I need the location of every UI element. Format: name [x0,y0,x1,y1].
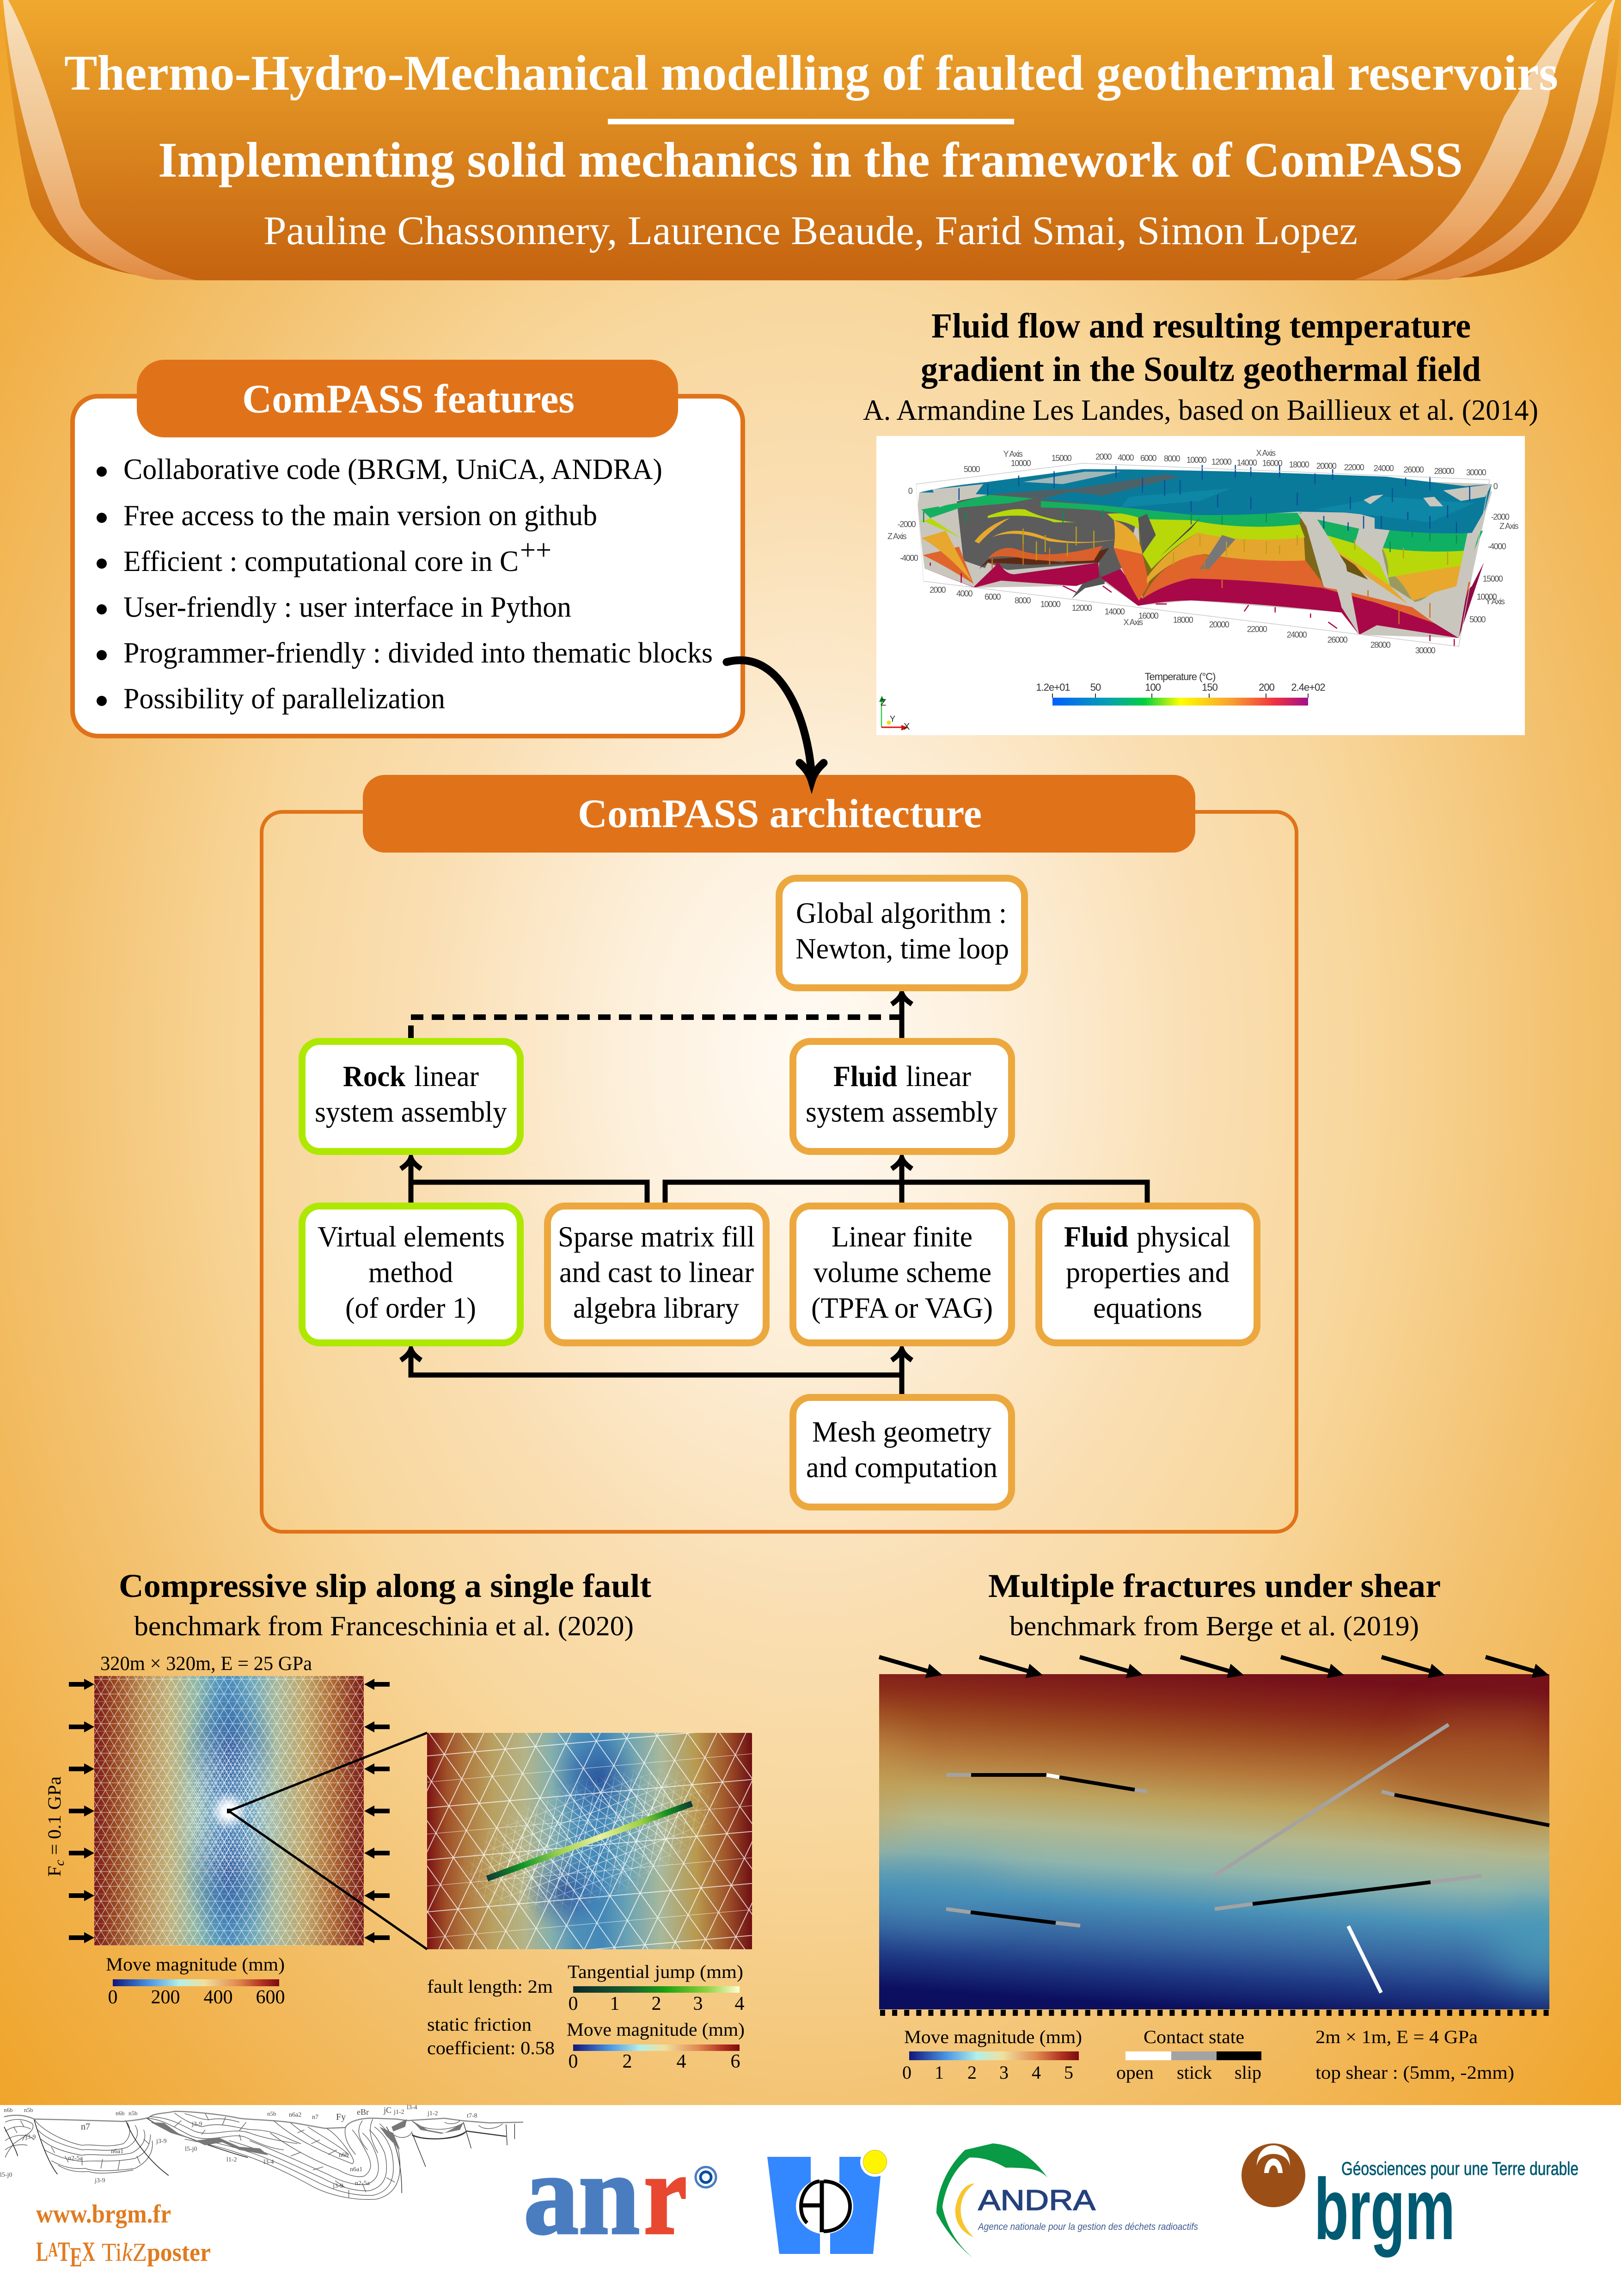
title: Thermo-Hydro-Mechanical modelling of faulted geothermal reservoirs [64,46,1558,101]
legend: contact state: Contact state [1144,2026,1244,2047]
box: linear finite volume scheme: (TPFA or VAG) [811,1291,993,1324]
temperature colour bar: 100 [1145,681,1161,693]
legend: tangential jump: Tangential jump (mm) [568,1961,743,1982]
heading: compressive slip [119,1567,651,1641]
mesh: zoom on fault [427,1732,752,1949]
shear parameters: top shear : (5mm, -2mm) [1315,2062,1514,2083]
sketch labels: j3-9 [94,2177,105,2184]
axis labels: 18000 [1289,460,1309,469]
box: mesh geometry: Mesh geometry [812,1415,991,1448]
features heading [137,360,678,437]
axis labels: 5000 [1469,615,1486,624]
subtitle: Implementing solid mechanics in the framework of ComPASS [158,133,1463,188]
box: fluid linear system assembly: linear [906,1060,971,1093]
legend: move magnitude zoom: 6 [730,2051,740,2072]
heading: compressive slip: Compressive slip along a single fault [119,1567,651,1604]
sketch labels: l3-4 [263,2159,274,2166]
sketch labels: j1-2 [393,2109,404,2116]
axis labels: 30000 [1415,646,1436,655]
axis labels: 30000 [1466,468,1486,477]
arrow: mesh to virtual elements and finite volume [401,1349,912,1394]
axis labels: 10000 [1040,600,1061,609]
legend: contact state [1116,2026,1261,2083]
axis labels: Y Axis [1486,597,1505,606]
axis labels: 14000 [1237,458,1257,467]
logo: ANDRA: ANDRA [978,2185,1096,2216]
axis labels: 2000 [930,585,946,595]
feature list: Efficient : computational core in C [123,545,519,577]
heading: multiple fractures: benchmark from Berge et al. (2019) [1009,1611,1419,1641]
arrow: sparse, finite volume and fluid properties to fluid assembly [665,1158,1147,1203]
legend: move magnitude full domain: 600 [256,1987,285,2008]
box: global algorithm [779,878,1024,988]
temperature colour bar: 50 [1090,681,1101,693]
heading: multiple fractures [988,1567,1441,1641]
axis labels: 4000 [1118,453,1134,462]
axis labels: 15000 [1052,454,1072,463]
mesh: full domain [94,1674,364,1949]
axis labels: 10000 [1477,592,1497,602]
axis labels: -4000 [1488,542,1506,551]
legend: tangential jump: 0 [569,1993,578,2014]
box: fluid linear system assembly: Fluid [833,1060,897,1093]
axis labels: 24000 [1374,464,1394,473]
orientation axes: Z [881,698,886,708]
sketch labels: n5b [24,2106,33,2113]
axis labels: X Axis [1123,618,1143,627]
sketch labels: n5b [267,2110,276,2117]
heading: compressive slip: benchmark from Franceschinia et al. (2020) [134,1611,634,1641]
heading: multiple fractures: Multiple fractures under shear [988,1567,1441,1604]
axis labels: 28000 [1434,467,1455,476]
sketch labels: n2-5a [68,2155,83,2162]
footer band [0,2104,1621,2296]
axis labels: 8000 [1164,454,1181,463]
feature list: Collaborative code (BRGM, UniCA, ANDRA) [123,453,662,485]
shear arrows [879,1657,1549,1678]
LaTeX TikZposter credit [36,2236,211,2272]
heading: Soultz figure: A. Armandine Les Landes, based on Baillieux et al. (2014) [863,394,1538,426]
header banner [0,0,1621,280]
logo: ADI [767,2147,890,2254]
axis labels: -2000 [898,520,916,529]
arrow: fluid assembly to global algorithm [892,993,912,1038]
LaTeX TikZposter credit: T [58,2236,70,2267]
load arrows right [364,1679,390,1943]
LaTeX TikZposter credit: A [48,2238,58,2261]
temperature colour bar: 150 [1202,681,1218,693]
orientation axes [879,696,910,732]
legend: move magnitude zoom: 4 [677,2051,686,2072]
arrow: features to architecture [727,660,824,780]
panel: multiple fractures figure [878,1655,1550,2083]
logo: anr: r [644,2130,687,2259]
legend: move magnitude full domain: 400 [203,1987,233,2008]
box: sparse matrix: Sparse matrix fill [558,1220,755,1253]
sketch labels: j3-9 [332,2183,343,2190]
box: fluid physical properties: equations [1093,1291,1202,1324]
orientation axes: Y [890,714,895,724]
displacement field [841,1674,1595,2009]
load label: F [44,1866,65,1877]
legend: contact state: stick [1177,2062,1212,2083]
sketch labels: eBr [357,2107,369,2117]
axis labels: 28000 [1370,640,1391,650]
temperature colour bar: 1.2e+01 [1036,681,1070,693]
temperature colour bar: 200 [1259,681,1275,693]
axis labels: 18000 [1173,615,1193,625]
sketch labels: j1-2 [427,2110,438,2117]
sketch labels: j3-9 [191,2121,202,2128]
box: virtual elements method: method [368,1256,453,1289]
feature list: User-friendly : user interface in Python [123,590,571,623]
website: www.brgm.fr [36,2200,171,2228]
legend: contact state: slip [1235,2062,1261,2083]
sketch labels: n6a1 [111,2148,123,2155]
heading: Soultz figure: gradient in the Soultz geothermal field [921,350,1481,389]
sketch labels: n2-5a [355,2180,370,2187]
legend: tangential jump [568,1961,744,2014]
axis labels: -2000 [1491,512,1510,522]
sketch labels: n6a2 [289,2112,301,2118]
logo: ANDRA [936,2143,1198,2258]
box: virtual elements method: (of order 1) [345,1291,476,1324]
box: fluid linear system assembly [793,1041,1011,1151]
sketch labels: l5-j0 [185,2146,197,2153]
logo: anr: an [524,2130,640,2259]
box: rock linear system assembly: Rock [343,1060,405,1093]
load label: c [53,1860,67,1866]
legend: move magnitude full domain: 200 [151,1987,180,2008]
legend: move magnitude zoom: 2 [622,2051,632,2072]
geological cross-section sketch [0,2104,523,2199]
connector: dashed rock to global [411,1017,902,1038]
LaTeX TikZposter credit: L [36,2236,55,2267]
axis labels: 0 [1493,482,1498,491]
LaTeX TikZposter credit: TikZ [102,2238,147,2267]
legend: move magnitude full domain [106,1954,285,2008]
box: rock linear system assembly: system assembly [315,1095,507,1128]
box: sparse matrix: and cast to linear [559,1256,754,1289]
box: mesh geometry: and computation [806,1451,997,1484]
legend: move magnitude zoom [567,2019,745,2072]
axis labels: 8000 [1015,596,1031,605]
LaTeX TikZposter credit: E [70,2242,82,2272]
axis labels: 20000 [1316,461,1337,471]
fractures [946,1725,1549,1993]
legend: move magnitude: 5 [1064,2062,1073,2083]
axis labels: 24000 [1287,630,1307,639]
features heading: ComPASS features [242,377,575,422]
sketch labels: l5-j0 [0,2172,12,2179]
axis labels: 2000 [1095,452,1112,461]
legend: move magnitude full domain: 0 [108,1987,117,2008]
flow vectors [924,465,1470,646]
sketch labels: l1-2 [226,2156,237,2163]
panel: ComPASS features [73,360,743,736]
box: rock linear system assembly [302,1041,520,1151]
axis labels: 20000 [1209,620,1230,629]
sketch labels: t7-8 [467,2112,477,2119]
axis labels: X Axis [1256,448,1276,458]
box: fluid physical properties: Fluid [1064,1220,1128,1253]
sketch labels: Fy [336,2112,346,2122]
fault parameters: coefficient: 0.58 [427,2038,555,2058]
panel: ComPASS architecture [262,775,1297,1532]
temperature colour bar: Temperature (°C) [1145,671,1215,682]
legend: move magnitude zoom: 0 [569,2051,578,2072]
axis labels: 16000 [1138,611,1159,620]
legend: move magnitude: Move magnitude (mm) [904,2026,1082,2047]
legend: move magnitude: 1 [935,2062,944,2083]
axis labels: 10000 [1187,455,1207,465]
load label: = 0.1 GPa [44,1776,65,1860]
axis labels: -4000 [900,553,918,563]
domain size label: 320m × 320m, E = 25 GPa [100,1653,312,1675]
fault parameters: static friction [427,2014,532,2035]
box: mesh geometry [793,1397,1011,1507]
axis labels: 10000 [1011,459,1031,468]
sketch labels: n5b [128,2110,138,2117]
axis labels: 22000 [1344,463,1364,472]
temperature colour bar [1036,671,1325,706]
box: virtual elements method: Virtual elements [318,1220,505,1253]
box: fluid linear system assembly: system assembly [806,1095,998,1128]
box: global algorithm: Newton, time loop [795,932,1009,965]
box: global algorithm: Global algorithm : [796,896,1007,929]
axis labels: 4000 [956,589,973,598]
feature list: ++ [520,534,551,566]
box: sparse matrix [547,1206,766,1343]
legend: tangential jump: 4 [735,1993,744,2014]
temperature colour bar: 2.4e+02 [1291,681,1325,693]
axis labels: 6000 [985,592,1001,602]
feature list: Programmer-friendly : divided into thematic blocks [123,636,713,669]
sketch labels: jC [383,2106,391,2115]
architecture heading [363,775,1195,853]
legend: move magnitude full domain: Move magnitude (mm) [106,1954,285,1975]
axis labels: Z Axis [1499,522,1519,531]
axis labels: 22000 [1247,625,1267,634]
sketch labels: j3-9 [156,2138,167,2145]
box: linear finite volume scheme: Linear finite [832,1220,973,1253]
feature list: Free access to the main version on github [123,499,597,532]
legend: move magnitude: 0 [902,2062,911,2083]
legend: move magnitude: 4 [1032,2062,1041,2083]
axis labels: 6000 [1140,454,1157,463]
legend: tangential jump: 3 [693,1993,703,2014]
zoom connector lines [229,1733,427,1949]
box: sparse matrix: algebra library [573,1291,739,1324]
feature list: Possibility of parallelization [123,682,445,715]
box: fluid physical properties: physical [1137,1220,1230,1253]
logo: BRGM: brgm [1314,2161,1455,2258]
heading: Soultz figure [863,307,1538,426]
fault [487,1804,692,1879]
architecture heading: ComPASS architecture [578,792,982,836]
LaTeX TikZposter credit: X [82,2236,95,2267]
axis labels: 15000 [1483,574,1503,583]
authors: Pauline Chassonnery, Laurence Beaude, Farid Smai, Simon Lopez [263,209,1358,253]
chart: Soultz 3D temperature model [876,436,1525,735]
legend: tangential jump: 2 [652,1993,661,2014]
box: fluid physical properties [1039,1206,1257,1343]
sketch labels: n6b [339,2152,349,2159]
logo: ANDRA: Agence nationale pour la gestion des déchets radioactifs [977,2222,1198,2232]
fixed boundary [880,2010,1549,2016]
arrow: virtual elements and sparse matrix to rock assembly [401,1158,647,1203]
heading: Soultz figure: Fluid flow and resulting temperature [931,307,1471,345]
LaTeX TikZposter credit: poster [147,2238,211,2267]
axis labels: 14000 [1105,607,1125,616]
axis labels: 26000 [1327,635,1348,645]
load arrows left [69,1679,94,1943]
panel: compressive slip figures [44,1653,752,2072]
axis labels: 12000 [1072,603,1092,613]
title rule [608,119,1014,124]
3D geological layers [916,463,1492,646]
legend: contact state: open [1116,2062,1154,2083]
sketch labels: l3-4 [407,2104,417,2111]
legend: move magnitude: 3 [999,2062,1009,2083]
sketch labels: n7 [312,2114,318,2121]
box: linear finite volume scheme [793,1206,1011,1343]
axis labels: 0 [908,486,913,496]
sketch labels: j3-9 [25,2134,36,2141]
sketch labels: n6a1 [350,2166,362,2173]
legend: move magnitude zoom: Move magnitude (mm) [567,2019,745,2040]
orientation axes: X [904,722,910,732]
sketch labels: n6b [116,2110,125,2117]
feature list [97,453,713,715]
shear parameters [1315,2026,1514,2083]
axis labels: 16000 [1262,459,1283,468]
box: linear finite volume scheme: volume scheme [814,1256,991,1289]
fault parameters: fault length: 2m [427,1976,553,1997]
legend: move magnitude [902,2026,1082,2083]
logo: BRGM [1242,2143,1578,2258]
axis labels: Y Axis [1003,449,1023,459]
box: rock linear system assembly: linear [414,1060,479,1093]
fault parameters [427,1976,555,2058]
box: fluid physical properties: properties and [1066,1256,1230,1289]
legend: move magnitude: 2 [967,2062,977,2083]
legend: tangential jump: 1 [610,1993,619,2014]
axis labels: 26000 [1404,465,1424,474]
axis labels: 12000 [1211,457,1232,467]
sketch labels: n6b [4,2106,13,2113]
box: virtual elements method [302,1206,520,1343]
sketch labels: n7 [81,2122,90,2132]
sketch labels [0,2104,477,2190]
axis labels: Z Axis [887,532,907,541]
axis labels: 5000 [964,465,980,474]
shear parameters: 2m × 1m, E = 4 GPa [1315,2026,1478,2047]
logo: anr [524,2130,716,2259]
axis labels [887,448,1519,655]
